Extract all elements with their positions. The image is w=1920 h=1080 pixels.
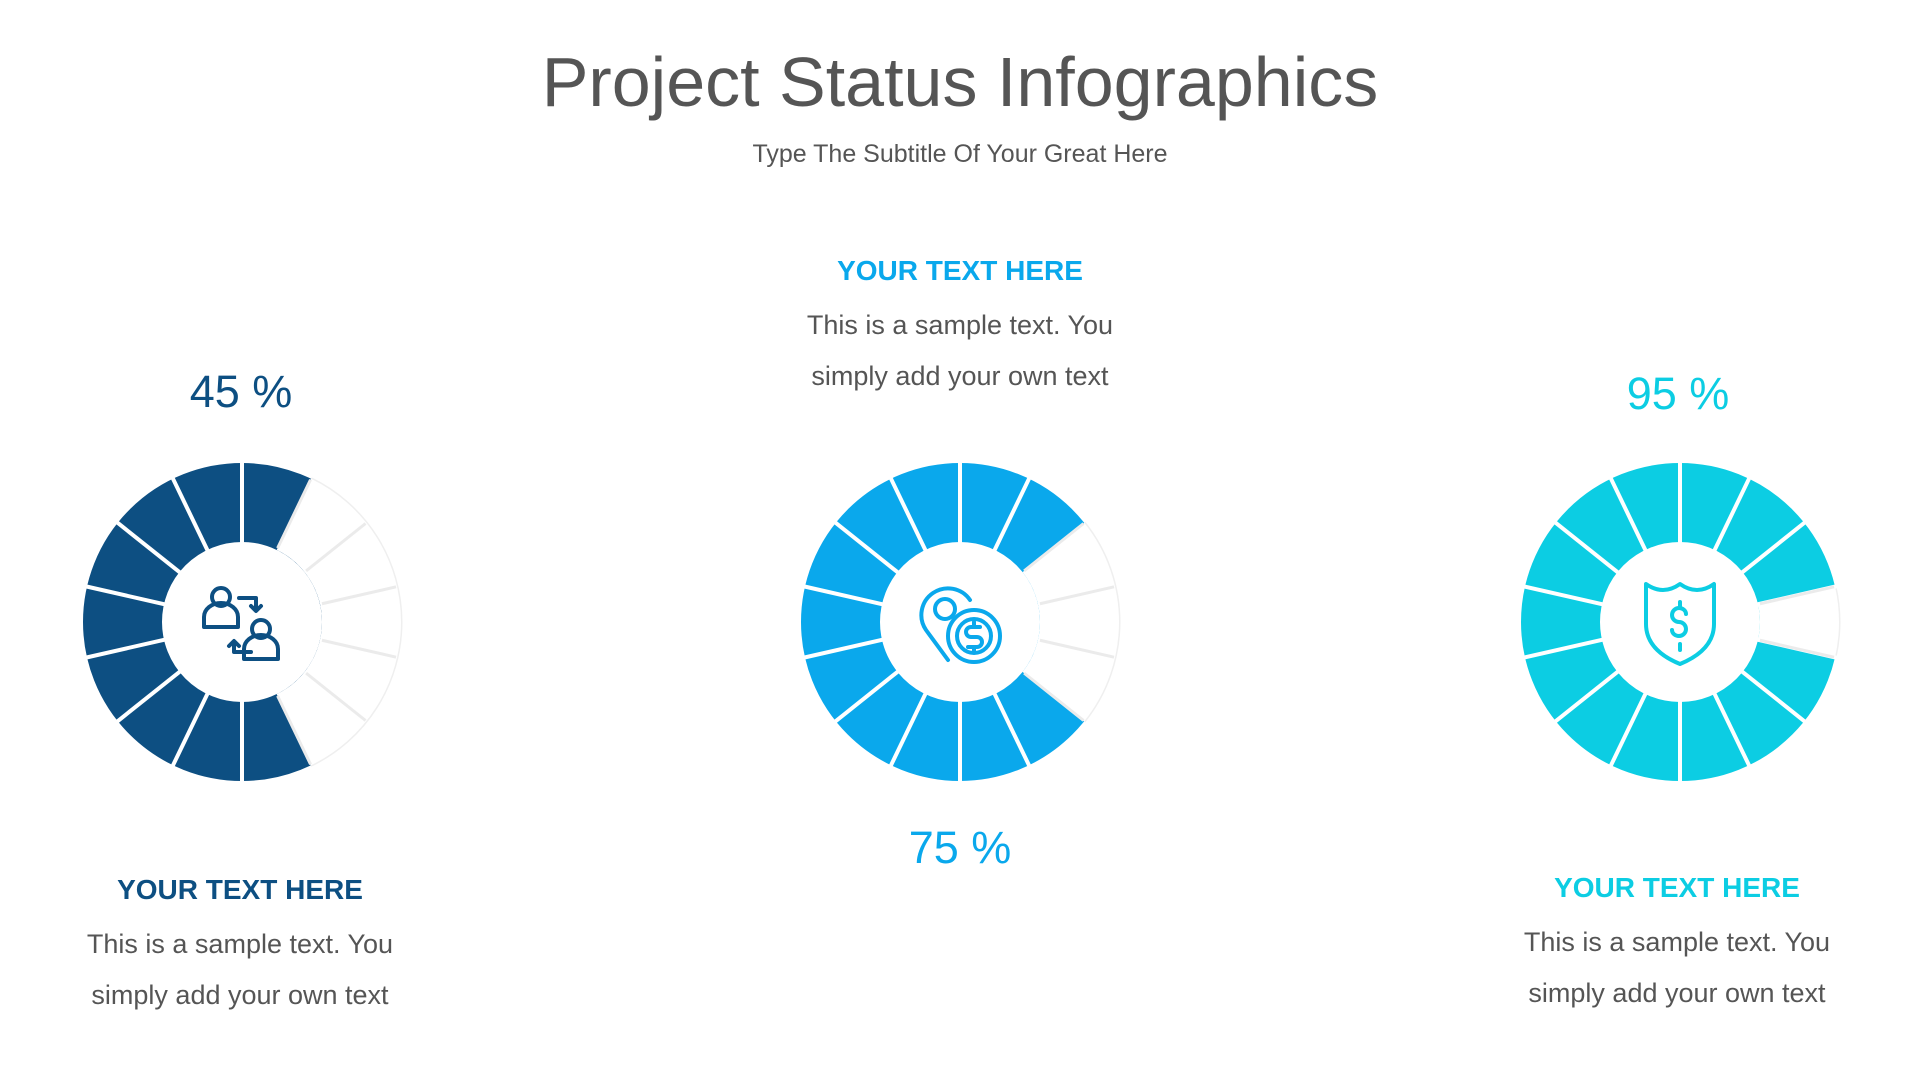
- subtitle: Type The Subtitle Of Your Great Here: [752, 140, 1168, 168]
- text block: right: This is a sample text. You: [1524, 927, 1830, 957]
- percent: left: 45 %: [190, 366, 292, 417]
- title: Project Status Infographics: [542, 43, 1378, 121]
- text block: right: simply add your own text: [1528, 978, 1826, 1008]
- text block: middle: simply add your own text: [811, 361, 1109, 391]
- text block: left: simply add your own text: [91, 980, 389, 1010]
- text block: left: This is a sample text. You: [87, 929, 393, 959]
- text block: right: [1524, 872, 1830, 1008]
- text block: middle: This is a sample text. You: [807, 310, 1113, 340]
- donut: right 95%: [1520, 458, 1840, 786]
- donut: middle 75%: [800, 458, 1119, 786]
- icon: people exchange: [204, 588, 278, 659]
- text block: middle: YOUR TEXT HERE: [837, 255, 1083, 286]
- donut: left 45%: [82, 458, 401, 786]
- icon: location pin with dollar coin: [921, 588, 1000, 662]
- text block: left: [87, 874, 393, 1010]
- percent: middle: 75 %: [909, 822, 1011, 873]
- icon: shield dollar: [1646, 584, 1714, 664]
- text block: right: YOUR TEXT HERE: [1554, 872, 1800, 903]
- text block: left: YOUR TEXT HERE: [117, 874, 363, 905]
- percent: right: 95 %: [1627, 368, 1729, 419]
- text block: middle: [807, 255, 1113, 391]
